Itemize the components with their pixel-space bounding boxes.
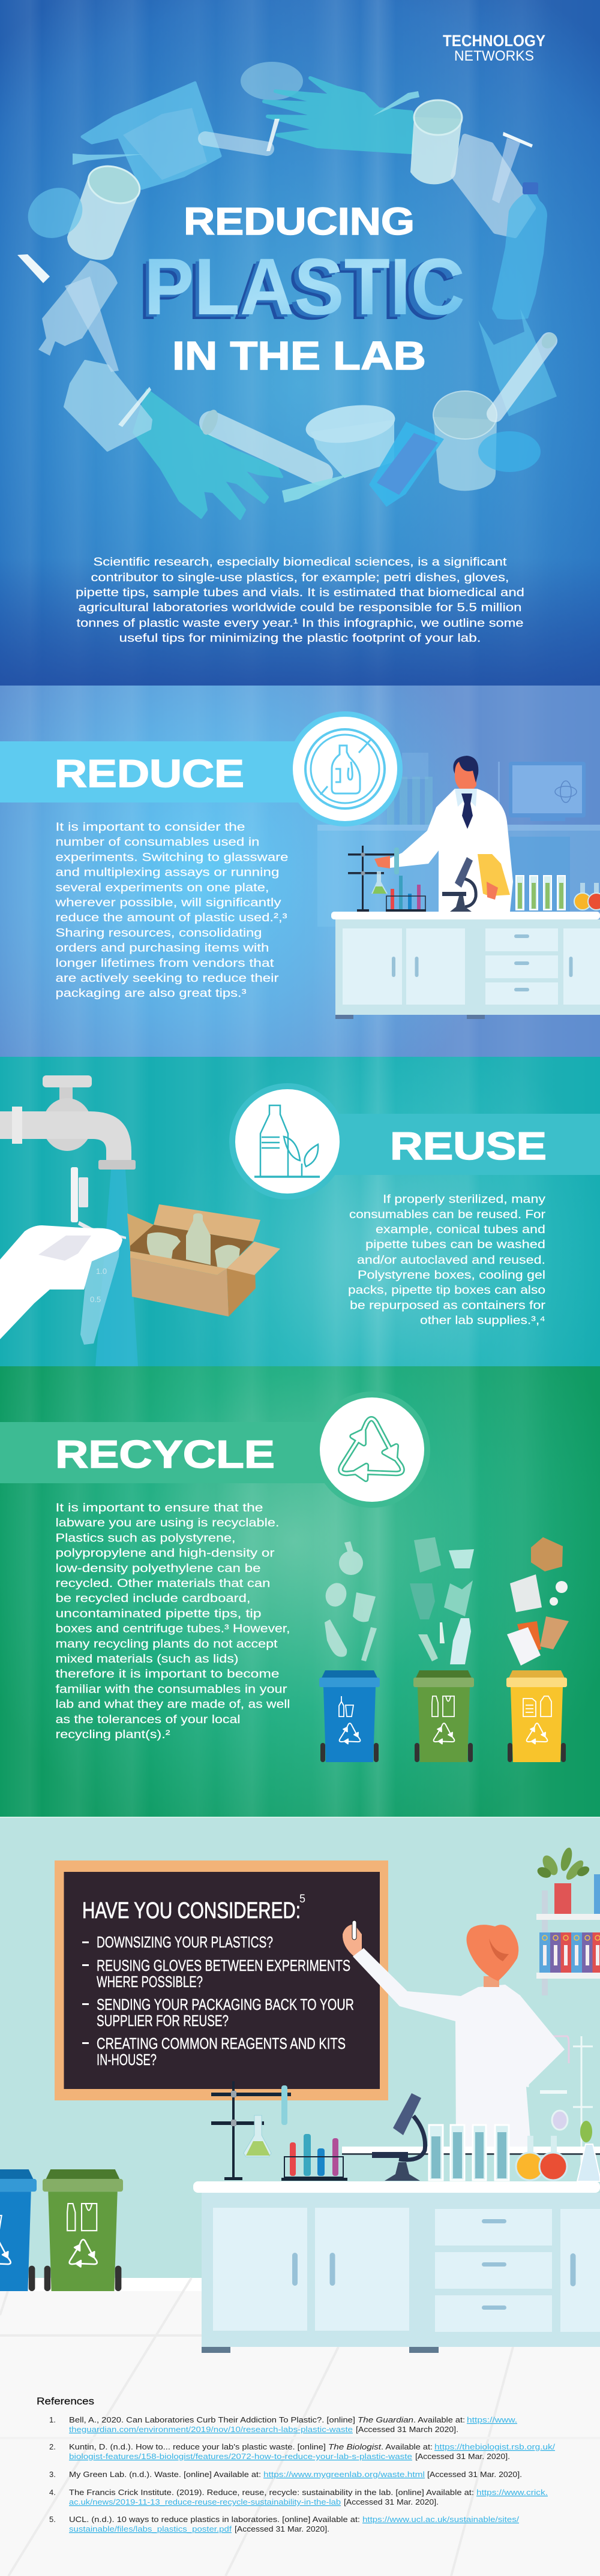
bin: green [43, 2169, 123, 2291]
recycle body text: mixed materials (such as lids) [55, 1652, 239, 1666]
title: REDUCING [184, 200, 415, 243]
title [138, 200, 465, 378]
reduce body text: are actively seeking to reduce their [55, 972, 279, 985]
reuse body text: pipette tubes can be washed [365, 1238, 545, 1251]
icon: petri dish top [241, 62, 303, 100]
title: IN THE LAB [172, 333, 426, 378]
title: PLASTIC [138, 247, 456, 336]
icon: large test tube bottom [199, 407, 321, 474]
recycle body text: lab and what they are made of, as well [55, 1698, 290, 1711]
reduce body text: and multiplexing assays or running [55, 866, 280, 879]
recycle body text: recycling plant(s).² [55, 1728, 170, 1741]
illustration: faucet [0, 1075, 136, 1170]
illustration: cardboard box [127, 1204, 280, 1316]
reduce body text [55, 820, 288, 1000]
icon: pipette tip [73, 154, 143, 165]
intro text: useful tips for minimizing the plastic footprint of your lab. [119, 632, 481, 645]
reuse body text: If properly sterilized, many [383, 1193, 545, 1206]
reference 1: theguardian.com/environment/2019/nov/10/research-labs-plastic-waste [69, 2425, 353, 2434]
reference 1 [49, 2415, 517, 2434]
reference 2: . Available at: [381, 2442, 433, 2451]
logo: Technology Networks [443, 32, 545, 64]
recycle body text: polypropylene and high-density or [55, 1547, 275, 1560]
reference 4: [Accessed 31 Mar. 2020]. [344, 2497, 439, 2506]
reference 2: Kuntin, D. (n.d.). How to... reduce your lab's plastic waste. [online] [69, 2442, 326, 2451]
box contents [147, 1213, 240, 1272]
icon: tall blue bottle [492, 182, 547, 320]
intro text: agricultural laboratories worldwide could be responsible for 5.5 million [78, 602, 522, 614]
reuse body text [348, 1193, 546, 1327]
tall test tubes [429, 2125, 509, 2180]
reference 4: ac.uk/news/2019-11-13_reduce-reuse-recycle-sustainability-in-the-lab [69, 2497, 341, 2506]
round flasks [516, 2121, 600, 2181]
recycle body text: low-density polyethylene can be [55, 1562, 260, 1575]
chalk list: IN-HOUSE? [97, 2051, 157, 2069]
recycle body text: as the tolerances of your local [55, 1713, 240, 1726]
recycle body text: familiar with the consumables in your [55, 1682, 287, 1696]
references [37, 2396, 555, 2533]
illustration: ring of plastic lab items [17, 62, 559, 519]
title: PLASTIC [144, 242, 465, 332]
reference 5: [Accessed 31 Mar. 2020]. [235, 2524, 329, 2533]
counter top [193, 2181, 600, 2193]
intro text: Scientific research, especially biomedical sciences, is a significant [94, 556, 507, 569]
heading band: reuse [324, 1114, 600, 1175]
icon: pale bottle right [454, 137, 533, 235]
reference 1: https://www. [467, 2415, 517, 2424]
reference 3: My Green Lab. (n.d.). Waste. [online] Available at: [69, 2470, 261, 2479]
hanging pipette [281, 2085, 287, 2125]
reference 3: 3. [49, 2470, 56, 2479]
icon: tube left [17, 254, 119, 372]
heading band: recycle: RECYCLE [55, 1432, 275, 1476]
title: PLASTIC [141, 245, 459, 334]
icon: recycling symbol [314, 1391, 430, 1508]
icon: pipette tip left [118, 387, 151, 427]
microscope [442, 857, 476, 912]
icon: pipette tip bottom [282, 473, 352, 503]
heading band: reuse: REUSE [390, 1124, 547, 1168]
icon: plastic tub left [65, 361, 151, 450]
background lab wall [317, 753, 600, 927]
chalk list: DOWNSIZING YOUR PLASTICS? [97, 1933, 273, 1951]
icon: pipette tip top right [373, 91, 419, 116]
chalk list: SUPPLIER FOR REUSE? [97, 2012, 229, 2030]
panel: hero [0, 0, 600, 687]
hanging pipette [394, 847, 399, 874]
intro text: pipette tips, sample tubes and vials. It is estimated that biomedical and [76, 587, 524, 599]
icon: beaker bottom right [433, 391, 497, 491]
recycle body text: therefore it is important to become [55, 1667, 280, 1681]
heading band: reduce: REDUCE [55, 752, 244, 795]
reference 1: Bell, A., 2020. Can Laboratories Curb Their Addiction To Plastic?. [online] [69, 2415, 355, 2424]
icon: glove top [264, 78, 412, 152]
reference 2: https://thebiologist.rsb.org.uk/ [434, 2442, 555, 2451]
icon: petri dish bottom right [478, 431, 541, 472]
scientist [374, 756, 513, 912]
bin: blue partial [0, 2169, 37, 2291]
reduce body text: orders and purchasing items with [55, 942, 269, 955]
reuse body text: Polystyrene boxes, cooling gel [358, 1269, 545, 1282]
reference 3: https://www.mygreenlab.org/waste.html [263, 2470, 425, 2479]
chalk list: SENDING YOUR PACKAGING BACK TO YOUR [97, 1995, 354, 2013]
chalk list [82, 1933, 354, 2069]
floor [0, 2278, 600, 2576]
ring stand [348, 846, 394, 912]
ring stand [211, 2081, 291, 2180]
reference 5: https://www.ucl.ac.uk/sustainable/sites/ [362, 2515, 519, 2524]
reduce body text: several experiments on one plate, [55, 881, 269, 894]
illustration: lab bench and scientist [331, 756, 600, 1019]
reduce body text: number of consumables used in [55, 835, 259, 849]
reduce body text: longer lifetimes from vendors that [55, 957, 274, 970]
reduce body text: reduce the amount of plastic used.²,³ [55, 911, 287, 924]
reuse body text: and/or autoclaved and reused. [357, 1254, 545, 1267]
icon: beaker top right [410, 100, 462, 184]
reference 5: UCL. (n.d.). 10 ways to reduce plastics in laboratories. [online] Available at: [69, 2515, 360, 2524]
woman scientist [343, 1920, 565, 2147]
illustration: gloved hand holding tube [0, 1167, 126, 1345]
tall test tubes [516, 876, 565, 910]
reference 4 [49, 2488, 548, 2506]
chalk list: CREATING COMMON REAGENTS AND KITS [97, 2034, 346, 2052]
test tube rack [281, 2134, 347, 2181]
reuse body text: packs, pipette tip boxes can also [348, 1284, 545, 1297]
icon: plastic bag top left [82, 83, 220, 188]
reduce body text: wherever possible, will significantly [55, 896, 281, 909]
reference 3 [49, 2470, 522, 2479]
water stream [95, 1170, 138, 1366]
flask [244, 2115, 271, 2157]
recycle body text: be recycled include cardboard, [55, 1592, 251, 1605]
icon: glove bottom [134, 390, 282, 519]
tube liquid [431, 2132, 506, 2178]
reference 1: . Available at: [413, 2415, 465, 2424]
background glassware [528, 2036, 593, 2183]
reference 2: [Accessed 31 Mar. 2020]. [415, 2452, 510, 2461]
reduce body text: Sharing resources, consolidating [55, 926, 262, 939]
recycle body text: labware you are using is recyclable. [55, 1516, 279, 1529]
recycle body text: uncontaminated pipette tips, tip [55, 1607, 262, 1620]
references heading: References [37, 2396, 94, 2407]
reference 2: 2. [49, 2442, 56, 2451]
bin: blue [319, 1670, 380, 1762]
panel: reuse [0, 1057, 600, 1366]
cabinet [335, 919, 600, 1019]
round flasks [574, 883, 600, 910]
reuse body text: be repurposed as containers for [350, 1299, 546, 1312]
heading band: recycle [0, 1422, 336, 1483]
reference 3: [Accessed 31 Mar. 2020]. [427, 2470, 522, 2479]
bin: green [413, 1670, 474, 1762]
icons: paper items above yellow bin [507, 1537, 569, 1666]
reference 2: biologist-features/158-biologist/features/2072-how-to-reduce-your-lab-s-plastic-waste [69, 2452, 412, 2461]
icons: plastic items above green bin [410, 1537, 474, 1664]
recycle body text: many recycling plants do not accept [55, 1637, 278, 1651]
recycle body text: boxes and centrifuge tubes.³ However, [55, 1622, 290, 1636]
logo: Technology Networks: NETWORKS [454, 48, 534, 64]
reference 4: https://www.crick. [476, 2488, 548, 2497]
test tube rack [386, 876, 426, 912]
panel: have you considered [0, 1817, 600, 2576]
recycle body text: recycled. Other materials that can [55, 1577, 270, 1590]
recycle body text [55, 1501, 290, 1741]
reduce body text: experiments. Switching to glassware [55, 850, 288, 864]
reference 1: 1. [49, 2415, 56, 2424]
icon: microcentrifuge tube top [205, 119, 280, 151]
reference 4: 4. [49, 2488, 56, 2497]
intro text: tonnes of plastic waste every year.¹ In this infographic, we outline some [77, 617, 524, 630]
panel: recycle [0, 1366, 600, 1817]
binders [539, 1932, 600, 1973]
reference 5 [49, 2515, 519, 2533]
illustration: gloved hand holding tube: 1.0 [96, 1267, 107, 1276]
reuse body text: example, conical tubes and [376, 1223, 545, 1236]
heading band: reduce [0, 741, 312, 802]
recycle body text: Plastics such as polystyrene, [55, 1531, 235, 1544]
reference 1: The Guardian [358, 2415, 413, 2424]
reference 4: The Francis Crick Institute. (2019). Reduce, reuse, recycle: sustainability in the lab. [online] Available at: [69, 2488, 474, 2497]
icons: glass items above blue bin [322, 1541, 377, 1661]
flask [371, 871, 388, 894]
microscope [372, 2093, 425, 2181]
reduce body text: It is important to consider the [55, 820, 245, 834]
cabinet [202, 2193, 600, 2353]
bin: yellow [506, 1670, 567, 1762]
chalk heading: HAVE YOU CONSIDERED: [82, 1898, 301, 1923]
blackboard [55, 1860, 388, 2100]
icon: squeeze tube [369, 422, 444, 507]
intro text: contributor to single-use plastics, for example; petri dishes, gloves, [91, 572, 509, 584]
reuse body text: consumables can be reused. For [349, 1208, 546, 1221]
plant [536, 1847, 591, 1914]
reference 1: [Accessed 31 March 2020]. [356, 2425, 458, 2434]
chalk list: WHERE POSSIBLE? [97, 1973, 203, 1991]
counter top [331, 912, 600, 919]
illustration: gloved hand holding tube: 0.5 [90, 1295, 101, 1304]
reference 2 [49, 2442, 555, 2461]
reference 5: sustainable/files/labs_plastics_poster.pdf [69, 2524, 232, 2533]
reference 5: 5. [49, 2515, 56, 2524]
chalk list: REUSING GLOVES BETWEEN EXPERIMENTS [97, 1956, 350, 1974]
reuse body text: other lab supplies.³,⁴ [420, 1314, 545, 1327]
blackboard: 5 [299, 1893, 305, 1905]
icon: pale bottle left [38, 260, 118, 356]
icon: test tube right [495, 330, 559, 414]
icon: plastic bag right [478, 309, 557, 416]
reference 2: The Biologist [328, 2442, 382, 2451]
intro text [76, 556, 524, 645]
reduce body text: packaging are also great tips.³ [55, 987, 247, 1000]
tube liquid [518, 883, 563, 909]
icon: tube right top [492, 132, 533, 203]
recycle body text: It is important to ensure that the [55, 1501, 263, 1514]
shelves and binders [536, 1847, 600, 1995]
icon: petri dish left [19, 178, 92, 248]
icon: beaker left [67, 160, 145, 260]
icon: plastic tub [304, 400, 397, 478]
icon: no plastic bottle [287, 711, 403, 826]
logo: Technology Networks: TECHNOLOGY [443, 32, 545, 50]
panel: reduce [0, 686, 600, 1057]
bench behind [342, 2147, 600, 2155]
icon: bottle and leaves [229, 1083, 346, 1200]
